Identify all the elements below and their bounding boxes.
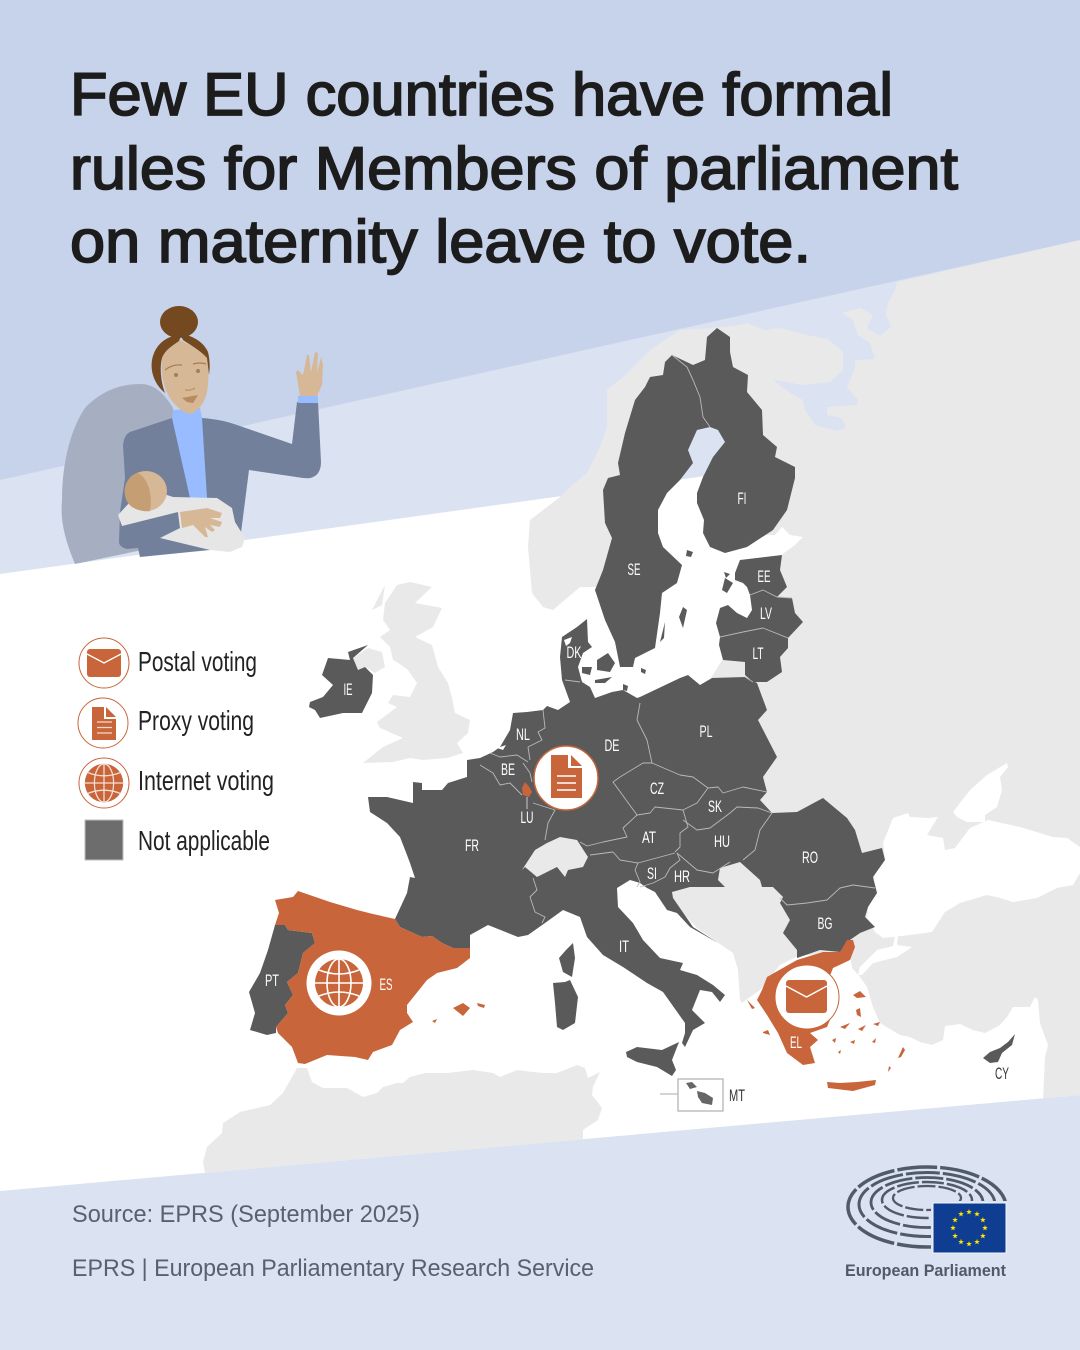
source text: Source: EPRS (September 2025) bbox=[72, 1201, 420, 1228]
Baltic states bbox=[716, 555, 803, 682]
shirt bbox=[172, 408, 207, 528]
islands: Denmark, Baltic, Italy, Cyprus bbox=[553, 550, 1015, 1076]
country labels: PL bbox=[700, 722, 712, 741]
country labels bbox=[265, 489, 1009, 1105]
icon: proxy voting on Luxembourg bbox=[527, 746, 598, 810]
Finland bbox=[672, 328, 795, 553]
country labels: HR bbox=[674, 867, 690, 886]
EU flag bbox=[933, 1203, 1006, 1253]
chair bbox=[62, 384, 190, 564]
country labels: HU bbox=[714, 832, 730, 851]
country labels: IT bbox=[619, 937, 629, 956]
map of Europe bbox=[203, 240, 1080, 1200]
country labels: BG bbox=[818, 914, 832, 933]
cuff bbox=[298, 396, 318, 403]
icon: postal voting on Greece bbox=[775, 965, 839, 1029]
country labels: IE bbox=[344, 680, 352, 699]
Switzerland bbox=[522, 837, 588, 877]
legend: internet voting: Internet voting bbox=[138, 765, 274, 796]
legend: not applicable bbox=[85, 820, 270, 860]
Sweden bbox=[595, 355, 710, 667]
country labels: DE bbox=[604, 736, 620, 755]
non-EU land: Norway, Russia, Balkans, Turkey bbox=[500, 240, 1080, 1100]
legend: not applicable: Not applicable bbox=[138, 825, 270, 856]
country labels: LV bbox=[760, 604, 772, 623]
jacket bbox=[119, 402, 321, 557]
author text: EPRS | European Parliamentary Research Service bbox=[72, 1255, 594, 1282]
North Africa bbox=[203, 1065, 602, 1173]
legend: postal voting bbox=[79, 638, 257, 688]
raised hand bbox=[296, 352, 323, 396]
country labels: EE bbox=[758, 567, 770, 586]
face bbox=[162, 340, 208, 414]
country labels: CY bbox=[995, 1064, 1009, 1083]
legend: proxy voting: Proxy voting bbox=[138, 705, 254, 736]
title: Few EU countries have formal bbox=[70, 61, 893, 128]
Greece bbox=[747, 940, 905, 1091]
legend: internet voting bbox=[79, 758, 274, 808]
country labels: LU bbox=[520, 808, 534, 827]
country labels: SI bbox=[647, 864, 657, 883]
country labels: SK bbox=[708, 797, 722, 816]
country labels: FI bbox=[738, 489, 746, 508]
hair bun bbox=[160, 306, 198, 338]
Luxembourg bbox=[522, 782, 532, 797]
baby head bbox=[125, 471, 167, 511]
icon: internet voting on Spain bbox=[306, 950, 372, 1016]
country labels: ES bbox=[380, 975, 392, 994]
Spain bbox=[275, 891, 485, 1064]
title: rules for Members of parliament bbox=[70, 135, 958, 202]
hair bbox=[152, 335, 210, 393]
country labels: DK bbox=[566, 643, 582, 662]
country labels: MT bbox=[729, 1086, 745, 1105]
country labels: SE bbox=[628, 560, 640, 579]
United Kingdom and Northern Ireland bbox=[353, 582, 470, 763]
country labels: AT bbox=[642, 828, 656, 847]
country labels: CZ bbox=[650, 779, 664, 798]
country labels: NL bbox=[516, 725, 530, 744]
legend bbox=[78, 638, 274, 860]
Malta inset bbox=[660, 1079, 723, 1111]
legend: postal voting: Postal voting bbox=[138, 646, 257, 677]
legend: proxy voting bbox=[78, 698, 254, 748]
logo wordmark: European Parliament bbox=[845, 1262, 1006, 1280]
Ireland bbox=[309, 645, 373, 718]
European Parliament logo bbox=[845, 1167, 1006, 1280]
country labels: PT bbox=[265, 971, 279, 990]
title bbox=[70, 61, 958, 275]
Black Sea and Sea of Azov bbox=[858, 763, 1080, 975]
country labels: LT bbox=[752, 644, 764, 663]
country labels: EL bbox=[790, 1033, 802, 1052]
facial features bbox=[165, 363, 206, 403]
illustration: woman voting with baby bbox=[62, 306, 323, 564]
Portugal bbox=[249, 925, 315, 1035]
baby blanket bbox=[118, 495, 245, 552]
hand on baby bbox=[180, 508, 222, 537]
country borders bbox=[480, 355, 875, 923]
hemicycle bbox=[848, 1167, 1006, 1247]
country labels: RO bbox=[802, 848, 818, 867]
country labels: FR bbox=[465, 836, 479, 855]
country labels: BE bbox=[501, 760, 515, 779]
countries not applicable: western and central Europe bbox=[368, 619, 885, 1047]
title: on maternity leave to vote. bbox=[70, 208, 811, 275]
white sea notches in Denmark bbox=[497, 637, 572, 750]
